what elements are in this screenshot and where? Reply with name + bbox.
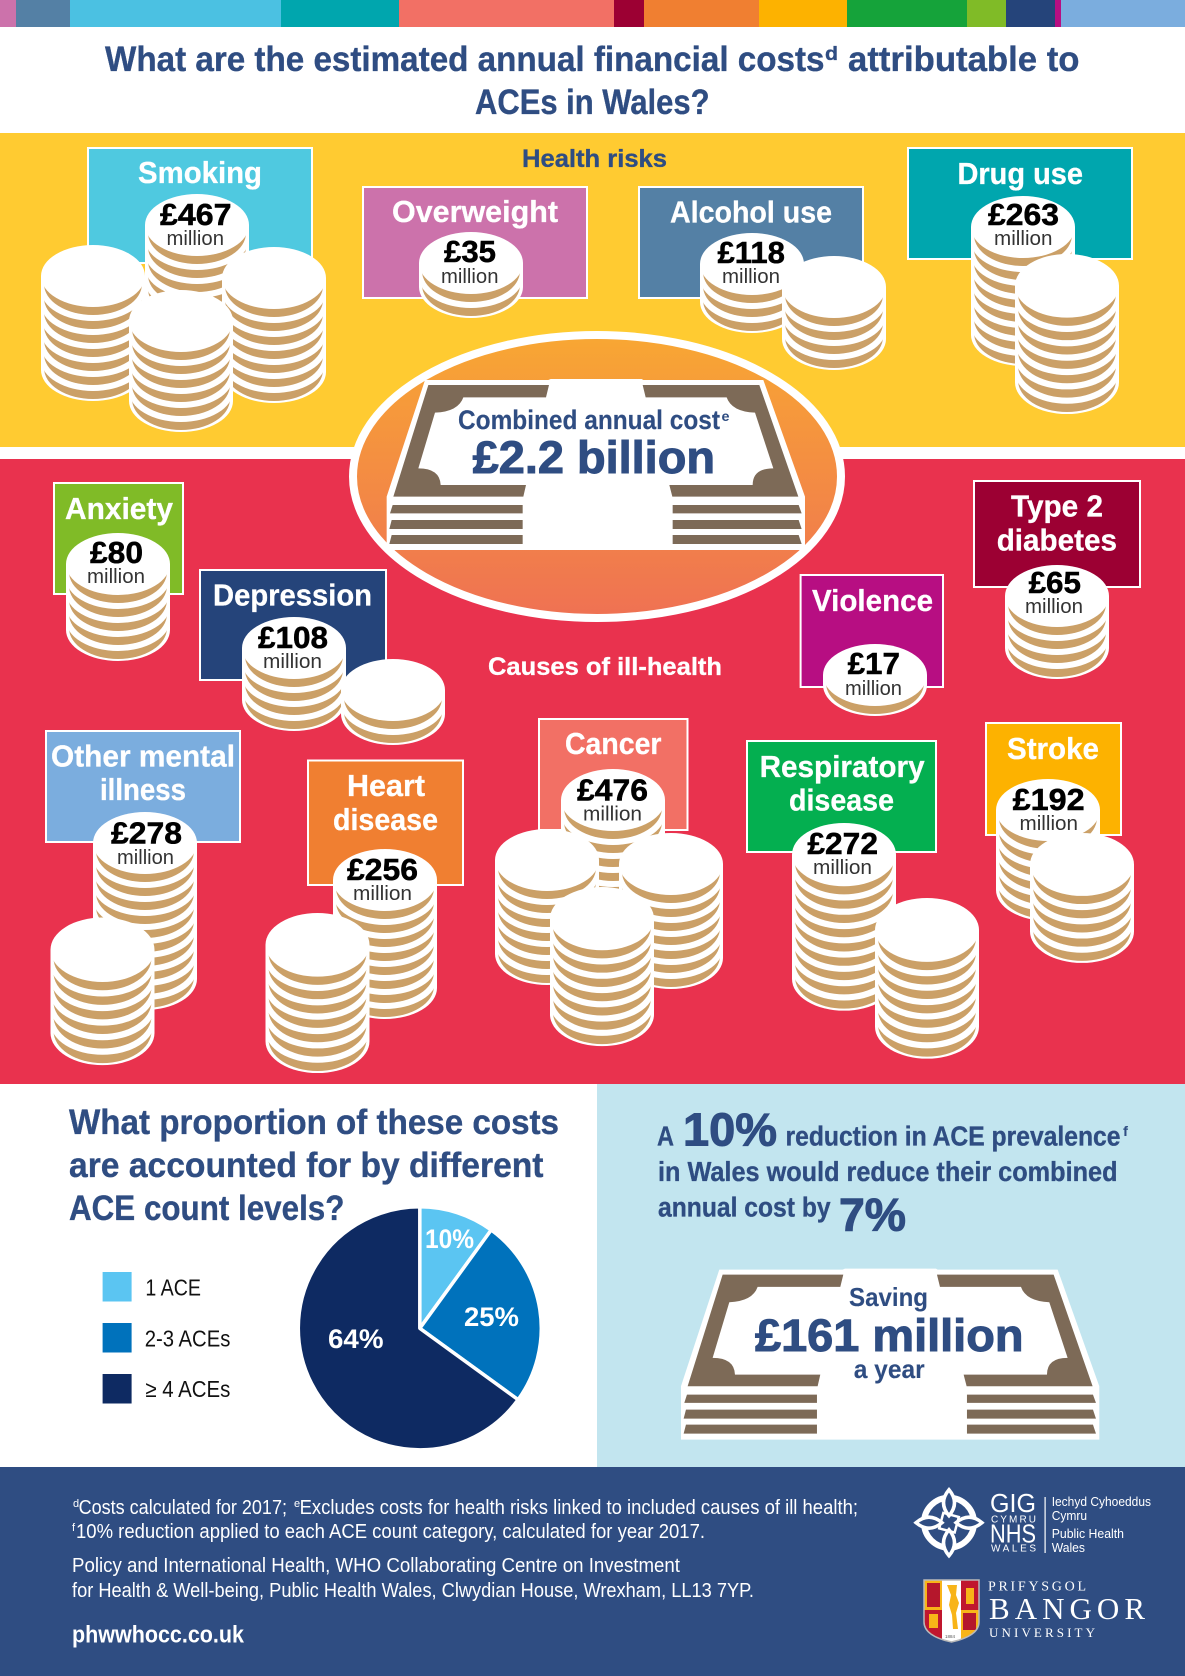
heading: causes of ill-health: Causes of ill-health <box>488 653 722 681</box>
depression: £108 <box>258 620 328 655</box>
saving text: a year <box>854 1354 925 1384</box>
icon: celtic knot <box>916 1490 982 1556</box>
logo: Bangor University: PRIFYSGOL <box>988 1580 1086 1595</box>
logo: Public Health Wales: CYMRU <box>991 1515 1036 1526</box>
central ellipse: combined annual cost <box>353 335 841 618</box>
respiratory disease <box>747 741 979 1059</box>
title: attributable to <box>848 40 1080 79</box>
other mental illness: million <box>117 847 174 869</box>
pie chart: 64% <box>328 1324 384 1354</box>
heading: proportion question: What proportion of these costs <box>69 1103 559 1142</box>
reduction statement: A <box>657 1121 674 1152</box>
cancer: £476 <box>577 773 648 808</box>
footnotes: Costs calculated for 2017; <box>79 1497 287 1519</box>
smoking: Smoking <box>138 155 262 190</box>
footer <box>0 1467 1185 1676</box>
panel: 10% reduction saving <box>597 1084 1185 1467</box>
type 2 diabetes: Type 2 <box>1011 489 1103 524</box>
logo: Public Health Wales: Wales <box>1052 1540 1085 1555</box>
logo: Bangor University <box>924 1580 1145 1642</box>
logo: Bangor University: BANGOR <box>989 1591 1145 1626</box>
respiratory disease: million <box>813 857 872 879</box>
respiratory disease: £272 <box>807 826 878 861</box>
smoking <box>41 148 326 432</box>
depression <box>200 570 445 745</box>
pie chart: 25% <box>464 1302 519 1332</box>
legend <box>103 1272 230 1404</box>
icon: banknote stack <box>681 1269 1099 1440</box>
type 2 diabetes <box>974 481 1140 679</box>
logo: Public Health Wales: Cymru <box>1052 1508 1087 1523</box>
colour strip <box>0 0 1185 27</box>
panel: causes of ill-health <box>0 459 1185 1084</box>
panel: health risks <box>0 133 1185 447</box>
type 2 diabetes: million <box>1025 596 1083 618</box>
reduction statement: in Wales would reduce their combined <box>658 1156 1118 1187</box>
anxiety: million <box>87 566 145 588</box>
footnotes: 10% reduction applied to each ACE count category, calculated for year 2017. <box>76 1521 705 1543</box>
panel: proportion by ACE count <box>0 1084 597 1467</box>
heart disease: Heart <box>347 768 425 803</box>
title <box>105 40 1080 122</box>
heart disease: million <box>353 883 412 905</box>
legend: 1 ACE <box>145 1275 201 1301</box>
saving text: Saving <box>849 1282 928 1312</box>
alcohol use: Alcohol use <box>670 194 832 230</box>
drug use <box>908 148 1132 414</box>
stroke: Stroke <box>1007 731 1099 766</box>
footnotes: d <box>73 1498 79 1510</box>
drug use: £263 <box>988 197 1059 232</box>
address: for Health & Well-being, Public Health Wales, Clwydian House, Wrexham, LL13 7YP. <box>72 1580 754 1602</box>
logo: Public Health Wales: GIG <box>990 1488 1036 1518</box>
other mental illness: illness <box>100 772 186 807</box>
reduction statement: reduction in ACE prevalence <box>786 1121 1120 1152</box>
stroke: £192 <box>1013 782 1085 817</box>
cancer: Cancer <box>565 726 662 761</box>
title: d <box>825 44 838 65</box>
footnotes <box>72 1497 858 1543</box>
violence: £17 <box>848 646 900 681</box>
smoking: £467 <box>160 197 232 232</box>
drug use: Drug use <box>958 156 1083 191</box>
icon: shield <box>924 1580 979 1642</box>
combined cost text: £2.2 billion <box>473 432 715 483</box>
alcohol use: million <box>722 266 780 288</box>
saving text: £161 million <box>755 1310 1024 1361</box>
address: Policy and International Health, WHO Collaborating Centre on Investment <box>72 1555 680 1577</box>
combined cost text: e <box>722 408 730 424</box>
logo: Public Health Wales: Iechyd Cyhoeddus <box>1052 1494 1151 1509</box>
logo: Public Health Wales: Public Health <box>1052 1526 1124 1541</box>
heading: health risks: Health risks <box>522 145 667 173</box>
reduction statement: f <box>1123 1123 1128 1139</box>
reduction statement <box>657 1104 1128 1241</box>
title: ACEs in Wales? <box>475 83 710 122</box>
overweight <box>363 187 587 318</box>
overweight: Overweight <box>392 194 558 229</box>
logo: Public Health Wales: WALES <box>991 1544 1036 1555</box>
website: phwwhocc.co.uk <box>72 1622 245 1649</box>
anxiety: Anxiety <box>65 491 174 526</box>
reduction statement: annual cost by <box>658 1192 831 1223</box>
type 2 diabetes: £65 <box>1029 565 1081 600</box>
other mental illness: £278 <box>111 816 182 850</box>
other mental illness <box>46 731 240 1065</box>
anxiety: £80 <box>90 535 143 570</box>
heart disease <box>266 760 463 1073</box>
footnotes: e <box>294 1498 300 1510</box>
pie chart: 10% <box>425 1224 474 1254</box>
legend: 2-3 ACEs <box>145 1326 230 1352</box>
reduction statement: 7% <box>839 1189 906 1241</box>
other mental illness: Other mental <box>51 738 235 774</box>
respiratory disease: Respiratory <box>760 749 925 784</box>
address <box>72 1555 754 1602</box>
heading: proportion question: are accounted for by different <box>69 1146 544 1185</box>
depression: Depression <box>213 578 372 612</box>
anxiety <box>54 483 183 661</box>
type 2 diabetes: diabetes <box>997 523 1117 558</box>
heart disease: disease <box>333 802 438 837</box>
heart disease: £256 <box>347 852 418 887</box>
overweight: million <box>441 266 498 288</box>
legend: ≥ 4 ACEs <box>145 1376 230 1402</box>
combined cost text: Combined annual cost <box>458 405 720 435</box>
smoking: million <box>166 228 224 250</box>
cancer: million <box>583 804 642 826</box>
violence: Violence <box>812 583 933 618</box>
icon: shield: 1884 <box>945 1634 956 1639</box>
title: What are the estimated annual financial costs <box>105 40 824 79</box>
respiratory disease: disease <box>789 783 894 818</box>
cancer <box>495 719 723 1046</box>
reduction statement: 10% <box>683 1104 777 1156</box>
stroke <box>986 723 1134 963</box>
logo: Public Health Wales <box>916 1488 1151 1556</box>
alcohol use <box>639 187 886 370</box>
heading: proportion question <box>69 1103 559 1228</box>
logo: Bangor University: UNIVERSITY <box>989 1625 1096 1640</box>
overweight: £35 <box>444 234 496 269</box>
violence <box>801 575 943 716</box>
logo: Public Health Wales: NHS <box>990 1519 1036 1549</box>
alcohol use: £118 <box>718 235 785 270</box>
footnotes: Excludes costs for health risks linked to included causes of ill health; <box>300 1497 858 1519</box>
drug use: million <box>994 228 1052 250</box>
violence: million <box>845 678 902 700</box>
icon: banknote stack <box>387 379 805 550</box>
depression: million <box>263 651 322 673</box>
heading: proportion question: ACE count levels? <box>69 1189 344 1228</box>
saving text <box>755 1282 1024 1384</box>
combined cost text <box>458 405 730 483</box>
footnotes: f <box>72 1522 76 1534</box>
pie chart <box>298 1207 541 1450</box>
stroke: million <box>1020 813 1078 835</box>
